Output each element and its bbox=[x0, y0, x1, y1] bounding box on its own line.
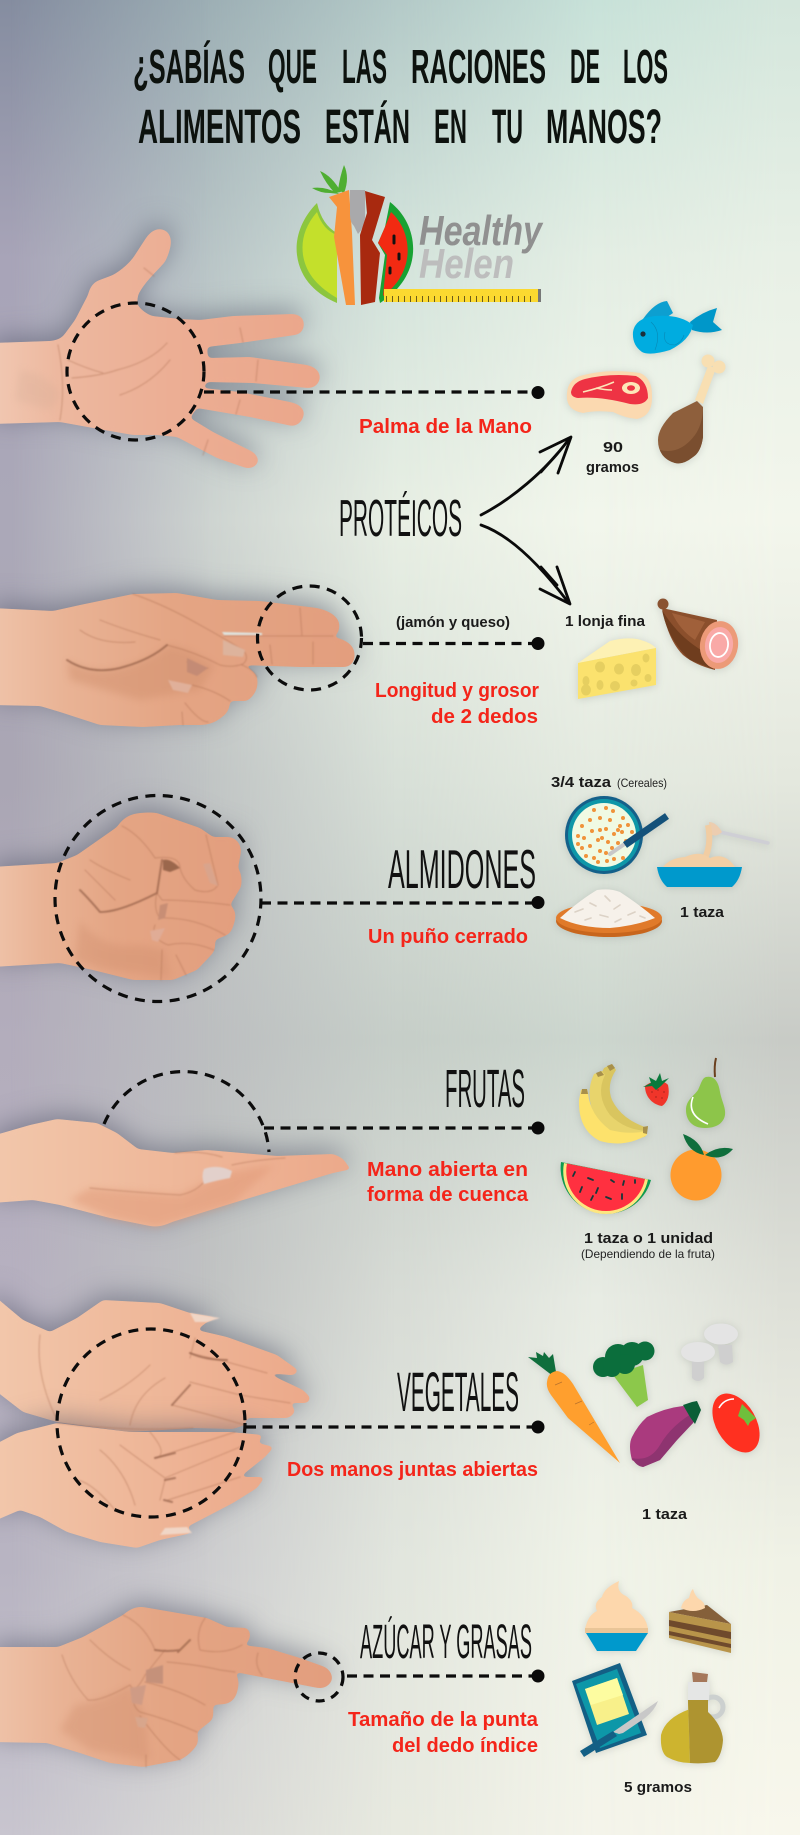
icon: cheese bbox=[578, 638, 656, 699]
icon: cereal bowl bbox=[565, 796, 667, 874]
dashed arc: cupped palm bbox=[104, 1072, 269, 1152]
icon: fish bbox=[633, 301, 722, 354]
label: Palma de la Mano: Palma de la Mano bbox=[359, 416, 532, 438]
hand: open palm bbox=[0, 229, 320, 468]
title: ESTÁN bbox=[325, 100, 410, 154]
icon: carrot bbox=[528, 1352, 620, 1463]
hand: cupped palm bbox=[0, 1119, 352, 1227]
icons: proteins bbox=[567, 301, 741, 699]
connector dot bbox=[532, 1670, 544, 1682]
title: DE bbox=[570, 41, 600, 94]
icons: starches bbox=[556, 796, 768, 937]
panel: vegetales bbox=[0, 1294, 769, 1548]
icon: cake slice bbox=[669, 1589, 731, 1653]
label: 1 taza o 1 unidad: (Dependiendo de la fruta) bbox=[581, 1247, 715, 1261]
title: TU bbox=[492, 101, 523, 154]
logo: Healthy Helen bbox=[297, 165, 544, 305]
label: Tamaño de la punta del dedo índice: Tamaño de la punta bbox=[348, 1709, 539, 1731]
connector dot bbox=[532, 1420, 544, 1434]
icon: orange bbox=[670, 1134, 733, 1200]
icon: broccoli bbox=[593, 1342, 654, 1407]
dashed connector bbox=[204, 390, 534, 394]
panel: palma de la mano bbox=[0, 229, 544, 468]
panel: almidones bbox=[0, 774, 768, 1002]
icons: sugars and fats bbox=[572, 1581, 731, 1763]
panel: frutas bbox=[0, 1058, 733, 1261]
hand: two fingers bbox=[0, 593, 355, 727]
label: Mano abierta en forma de cuenca bbox=[367, 1159, 529, 1206]
label: 90 gramos: gramos bbox=[586, 459, 639, 476]
icon: pasta bowl bbox=[657, 822, 768, 887]
panel: almidones: ALMIDONES bbox=[388, 838, 536, 900]
icon: mushrooms bbox=[681, 1324, 738, 1381]
icon: eggplant bbox=[630, 1401, 701, 1467]
panel: frutas: FRUTAS bbox=[445, 1059, 525, 1119]
icon: ice cream bowl bbox=[585, 1581, 648, 1651]
label: Longitud y grosor de 2 dedos bbox=[375, 680, 539, 728]
connector dot bbox=[532, 1122, 544, 1134]
label: 1 taza o 1 unidad: 1 taza o 1 unidad bbox=[584, 1230, 713, 1247]
label: 1 lonja fina: 1 lonja fina bbox=[565, 613, 646, 630]
label: Mano abierta en forma de cuenca: forma de cuenca bbox=[367, 1184, 529, 1206]
panel: vegetales: VEGETALES bbox=[397, 1360, 519, 1423]
title: ALIMENTOS bbox=[138, 101, 301, 154]
title: EN bbox=[434, 101, 467, 154]
title: LAS bbox=[342, 41, 387, 94]
icon: tomato bbox=[703, 1385, 769, 1461]
label: 5 gramos: 5 gramos bbox=[624, 1779, 692, 1796]
dashed connector bbox=[261, 901, 534, 905]
title: ¿SABÍAS bbox=[133, 40, 245, 94]
dashed connector bbox=[264, 1126, 534, 1130]
label: 90 gramos bbox=[586, 439, 639, 476]
dashed connector bbox=[246, 1425, 534, 1429]
icon: pear bbox=[686, 1058, 725, 1128]
label: Dos manos juntas abiertas: Dos manos juntas abiertas bbox=[287, 1459, 538, 1481]
title: MANOS? bbox=[546, 101, 662, 154]
label: Tamaño de la punta del dedo índice: del dedo índice bbox=[392, 1735, 538, 1757]
hand: closed fist bbox=[0, 812, 242, 980]
label: Longitud y grosor de 2 dedos: de 2 dedos bbox=[431, 706, 538, 728]
icon: watermelon slice bbox=[561, 1162, 651, 1214]
dashed circle: two fingers bbox=[258, 586, 362, 690]
dashed connector bbox=[347, 1674, 534, 1678]
icons: fruits bbox=[561, 1058, 733, 1214]
panel: azúcar y grasas bbox=[0, 1581, 731, 1796]
logo: Healthy Helen: Healthy bbox=[419, 207, 544, 254]
icon: steak bbox=[567, 371, 652, 419]
arrow: down to ham and cheese bbox=[481, 525, 570, 604]
arrow: up to meats bbox=[481, 437, 571, 515]
text: LOS bbox=[623, 41, 668, 94]
label: jamón y queso: (jamón y queso) bbox=[396, 614, 510, 631]
connector dot bbox=[532, 386, 544, 399]
panel: dos dedos bbox=[0, 586, 544, 728]
icon: bananas bbox=[579, 1064, 648, 1143]
hand: pointing finger bbox=[0, 1607, 332, 1767]
icon: ham bbox=[658, 598, 741, 671]
dashed connector bbox=[363, 642, 534, 645]
icon: strawberry bbox=[643, 1073, 669, 1106]
logo: Healthy Helen: Helen bbox=[419, 240, 514, 287]
label: 1 taza: 1 taza bbox=[642, 1506, 688, 1523]
label: 3/4 taza (Cereales): 3/4 taza bbox=[551, 774, 612, 791]
label: 1 taza o 1 unidad bbox=[581, 1230, 715, 1261]
label: Mano abierta en forma de cuenca: Mano abierta en bbox=[367, 1159, 528, 1181]
icon: butter board bbox=[572, 1663, 658, 1757]
dashed circle: fingertip bbox=[295, 1653, 343, 1701]
text: PROTÉICOS bbox=[339, 490, 462, 548]
label: 3/4 taza (Cereales) bbox=[551, 774, 667, 791]
label: Un puño cerrado: Un puño cerrado bbox=[368, 926, 528, 948]
label: Tamaño de la punta del dedo índice bbox=[348, 1709, 539, 1757]
label: 90 gramos: 90 bbox=[603, 439, 623, 456]
dashed circle: hands bbox=[57, 1329, 245, 1517]
title: QUE bbox=[268, 41, 317, 94]
connector dot bbox=[532, 637, 544, 650]
label: Longitud y grosor de 2 dedos: Longitud y grosor bbox=[375, 680, 539, 702]
icon: rice plate bbox=[556, 889, 662, 937]
connector dot bbox=[532, 896, 544, 909]
label: 3/4 taza (Cereales): (Cereales) bbox=[617, 776, 667, 790]
label: 1 taza: 1 taza bbox=[680, 904, 725, 921]
icon: oil bottle bbox=[661, 1672, 723, 1763]
dashed circle: palm bbox=[67, 303, 204, 440]
icons: vegetables bbox=[528, 1324, 769, 1467]
hands: two open hands bbox=[0, 1294, 310, 1548]
icon: chicken leg bbox=[658, 354, 726, 463]
title: RACIONES bbox=[411, 41, 546, 94]
dashed circle: fist bbox=[55, 796, 261, 1002]
title bbox=[133, 40, 668, 154]
